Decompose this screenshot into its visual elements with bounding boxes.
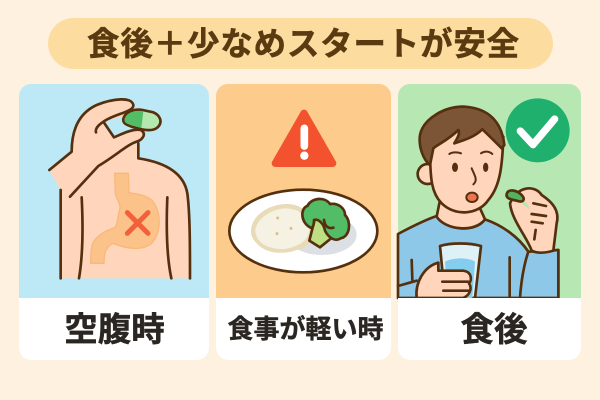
title banner bbox=[48, 18, 553, 69]
icon: check badge bbox=[506, 98, 570, 162]
sweater bbox=[398, 216, 558, 298]
face details bbox=[449, 152, 492, 202]
face bbox=[430, 129, 503, 212]
hand holding glass bbox=[416, 263, 471, 298]
panel: after a light meal bbox=[216, 84, 391, 360]
glass of water bbox=[440, 243, 481, 298]
rice bbox=[251, 204, 313, 253]
hair bbox=[420, 107, 504, 165]
icon: red cross bbox=[127, 213, 148, 233]
icon: capsule bbox=[123, 110, 160, 130]
icon: broccoli bbox=[302, 199, 349, 247]
illustration: hand, capsule and stomach bbox=[49, 99, 190, 278]
icon: plate bbox=[229, 190, 377, 272]
neck bbox=[437, 200, 485, 228]
illustration: warning and plate bbox=[229, 113, 377, 272]
icon: stomach bbox=[91, 173, 159, 263]
label: 食後 bbox=[460, 312, 528, 349]
raised hand and capsule bbox=[507, 188, 557, 253]
illustration: man taking a capsule with water bbox=[398, 98, 570, 298]
ear bbox=[418, 164, 438, 184]
label: 空腹時 bbox=[64, 312, 165, 349]
panel: after eating bbox=[398, 84, 581, 360]
label: 食事が軽い時 bbox=[227, 314, 384, 344]
title banner: 食後＋少なめスタートが安全 bbox=[87, 25, 520, 62]
icon: warning triangle bbox=[275, 113, 333, 163]
panel: on an empty stomach bbox=[19, 84, 209, 360]
